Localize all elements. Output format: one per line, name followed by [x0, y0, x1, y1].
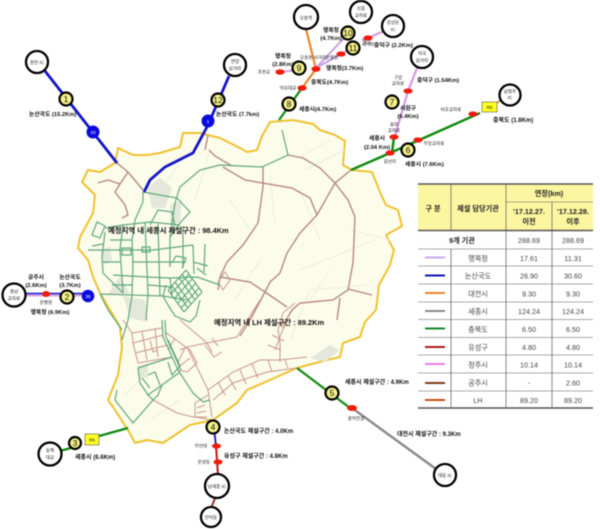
routes 6 and 7: Chungbuk-do, Sejong, Seowon-gu sections: IC	[508, 95, 513, 100]
developed area patches	[100, 178, 340, 378]
routes 8 to 11: Osong and Gangseo area: 11	[349, 43, 358, 53]
route 3: Sejong city to Dongbaek bridge: 동백	[46, 447, 54, 454]
route 2: Chungnam junction	[2, 273, 94, 316]
routes 6 and 7: Chungbuk-do, Sejong, Seowon-gu sections: (2.04 Km)	[364, 145, 390, 151]
routes 6 and 7: Chungbuk-do, Sejong, Seowon-gu sections: 교차로	[388, 127, 400, 134]
routes 8 to 11: Osong and Gangseo area: 행복청(3.7Km)	[326, 64, 363, 72]
total row: 9개 기관	[449, 236, 475, 245]
routes 8 to 11: Osong and Gangseo area: 충덕구 (2.2Km)	[374, 41, 413, 49]
total row	[449, 236, 584, 245]
table values: 대전시	[468, 290, 488, 298]
routes 6 and 7: Chungbuk-do, Sejong, Seowon-gu sections: 부강교차로	[424, 140, 444, 147]
route 12: Nonsan national road from Yeonyang junction	[144, 54, 259, 192]
table values: 124.24	[562, 307, 584, 316]
route 1: Nonsan national road from Cheonan IC: 43	[90, 130, 96, 135]
faint minor roads	[125, 140, 390, 420]
routes 8 to 11: Osong and Gangseo area: 행복청	[323, 26, 339, 34]
table header: 구 분	[425, 204, 441, 213]
route 5: Sejong and Daejeon sections: 대동 IC	[438, 472, 453, 479]
table values: 124.24	[518, 307, 540, 316]
map label: Sejong section: 예정지역 내 세종시 제설구간 : 98.4Km	[108, 226, 229, 235]
route 4: Nonsan road and Yuseong-gu section: 부안대	[195, 442, 207, 450]
routes 8 to 11: Osong and Gangseo area: 운왕천	[326, 54, 338, 60]
route 4: Nonsan road and Yuseong-gu section: 남세종 IC	[208, 483, 227, 490]
routes 8 to 11: Osong and Gangseo area: 세종시(4.7Km)	[299, 105, 336, 113]
table grid	[418, 184, 593, 408]
routes 6 and 7: Chungbuk-do, Sejong, Seowon-gu sections: 6	[406, 145, 411, 155]
LH snow removal roads	[98, 135, 372, 420]
routes 6 and 7: Chungbuk-do, Sejong, Seowon-gu sections: 세종시	[369, 134, 385, 142]
table header: '17.12.28.	[557, 207, 589, 216]
route 5: Sejong and Daejeon sections: 봉덕전설	[348, 415, 364, 422]
route 4: Nonsan road and Yuseong-gu section: 안덕동	[205, 514, 217, 521]
route 5: Sejong and Daejeon sections: 5	[330, 388, 335, 398]
route 2: Chungnam junction: 36	[85, 294, 91, 299]
table header: '17.12.27.	[513, 207, 545, 216]
routes 6 and 7: Chungbuk-do, Sejong, Seowon-gu sections: 충북도 (1.8Km)	[493, 116, 533, 124]
legend rows	[425, 258, 445, 400]
routes 8 to 11: Osong and Gangseo area: 교차로	[355, 12, 367, 19]
table values: 2.60	[566, 378, 580, 388]
table values: 10.14	[564, 360, 582, 370]
Sejong city snow removal roads	[88, 130, 288, 423]
route 3: Sejong city to Dongbaek bridge: R6	[89, 438, 95, 442]
table values: 4.80	[522, 343, 536, 352]
route 2: Chungnam junction: (2.6Km)	[25, 283, 47, 289]
table values: 논산국도	[465, 272, 492, 280]
route 12: Nonsan national road from Yeonyang junction: 논산국도 (7.7km)	[216, 110, 259, 118]
route 4: Nonsan road and Yuseong-gu section: 논산국도 제설구간 : 4.0Km	[224, 427, 293, 435]
route 3: Sejong city to Dongbaek bridge	[38, 428, 128, 466]
routes 6 and 7: Chungbuk-do, Sejong, Seowon-gu sections: 교차로	[392, 80, 404, 87]
routes 8 to 11: Osong and Gangseo area: 9	[297, 63, 302, 73]
table: snow removal length by agency	[418, 184, 593, 408]
routes 8 to 11: Osong and Gangseo area: 충북도(4.7Km)	[311, 78, 348, 86]
route 5: Sejong and Daejeon sections: 대전시 제설구간 : 9.3Km	[397, 430, 461, 438]
routes 8 to 11: Osong and Gangseo area	[258, 1, 413, 120]
route 4: Nonsan road and Yuseong-gu section: 문성동	[198, 458, 210, 464]
routes 8 to 11: Osong and Gangseo area: IC	[391, 27, 396, 32]
routes 8 to 11: Osong and Gangseo area: 미호대교	[280, 84, 296, 92]
table header: 연장(km)	[535, 189, 564, 198]
route 2: Chungnam junction: 2	[65, 292, 70, 302]
total row: 288.69	[518, 236, 540, 245]
routes 6 and 7: Chungbuk-do, Sejong, Seowon-gu sections	[351, 46, 533, 170]
table header: 제설 담당기관	[457, 204, 499, 213]
routes 8 to 11: Osong and Gangseo area: 강상돈	[387, 19, 399, 25]
table values: 세종시	[468, 307, 488, 316]
map: Sejong region	[78, 120, 402, 443]
route 3: Sejong city to Dongbaek bridge: 세종시 (6.6Km)	[75, 453, 115, 461]
table values: 6.50	[522, 325, 536, 334]
table values: 30.60	[564, 272, 582, 280]
route 2: Chungnam junction: 충남	[10, 288, 18, 294]
table values: 89.20	[520, 396, 538, 405]
table values: 26.90	[520, 272, 538, 280]
routes 6 and 7: Chungbuk-do, Sejong, Seowon-gu sections: 갈산리	[384, 158, 396, 165]
routes 8 to 11: Osong and Gangseo area: 행복청	[275, 52, 291, 60]
routes 6 and 7: Chungbuk-do, Sejong, Seowon-gu sections: R6	[487, 105, 493, 110]
table values	[465, 254, 584, 405]
routes 6 and 7: Chungbuk-do, Sejong, Seowon-gu sections: (6.4Km)	[397, 114, 419, 120]
routes 6 and 7: Chungbuk-do, Sejong, Seowon-gu sections: 세종시 (7.6Km)	[405, 160, 444, 168]
table header	[418, 184, 593, 230]
route 2: Chungnam junction: 공주시	[28, 274, 44, 281]
route 1: Nonsan national road from Cheonan IC: 1	[64, 94, 69, 104]
route 5: Sejong and Daejeon sections	[297, 368, 461, 486]
routes 8 to 11: Osong and Gangseo area: 조천교	[258, 68, 270, 74]
routes 6 and 7: Chungbuk-do, Sejong, Seowon-gu sections: 남청주	[504, 88, 516, 95]
routes 6 and 7: Chungbuk-do, Sejong, Seowon-gu sections: 삼거리	[416, 57, 428, 64]
routes 6 and 7: Chungbuk-do, Sejong, Seowon-gu sections: 서원구	[400, 104, 417, 112]
region boundary	[78, 120, 402, 443]
routes 6 and 7: Chungbuk-do, Sejong, Seowon-gu sections: 휴리	[390, 121, 398, 128]
table values: 89.20	[564, 396, 582, 405]
route 2: Chungnam junction: (3.7Km)	[59, 283, 81, 289]
route 2: Chungnam junction: 행복청 (6.9Km)	[31, 308, 70, 316]
table values: 행복청	[468, 254, 488, 263]
table values: 유성구	[468, 343, 488, 352]
table values: 4.80	[566, 343, 580, 352]
routes 8 to 11: Osong and Gangseo area: (4.7Km)	[320, 36, 342, 42]
routes 8 to 11: Osong and Gangseo area: 8	[287, 99, 292, 109]
table values: LH	[473, 396, 483, 405]
total row: 288.69	[562, 236, 584, 245]
route 12: Nonsan national road from Yeonyang junction: 12	[213, 95, 223, 105]
table values: 공주시	[468, 378, 488, 388]
table values: 11.31	[564, 254, 582, 263]
route 2: Chungnam junction: 논산국도	[59, 273, 81, 281]
route 3: Sejong city to Dongbaek bridge: 3	[73, 438, 78, 448]
routes 6 and 7: Chungbuk-do, Sejong, Seowon-gu sections: 석곡	[418, 50, 426, 57]
routes 8 to 11: Osong and Gangseo area: (2.8Km)	[272, 62, 294, 68]
table values: 10.14	[520, 360, 538, 370]
routes 8 to 11: Osong and Gangseo area: 신흥	[357, 5, 365, 11]
routes 8 to 11: Osong and Gangseo area: 오송역	[300, 14, 312, 22]
route 3: Sejong city to Dongbaek bridge: 대교	[46, 454, 54, 461]
route 12: Nonsan national road from Yeonyang junction: 연양	[231, 58, 239, 64]
routes 8 to 11: Osong and Gangseo area: 10	[343, 28, 353, 38]
route 1: Nonsan national road from Cheonan IC: 천안 IC	[30, 59, 45, 65]
table values: 충북도	[468, 325, 488, 334]
routes 6 and 7: Chungbuk-do, Sejong, Seowon-gu sections: 비호교차로	[441, 106, 461, 113]
route 4: Nonsan road and Yuseong-gu section: 유성구 제설구간 : 4.8Km	[224, 452, 288, 460]
routes 8 to 11: Osong and Gangseo area: 오송천 사거리	[300, 54, 326, 61]
routes 6 and 7: Chungbuk-do, Sejong, Seowon-gu sections: 충덕구 (1.54Km)	[417, 76, 459, 84]
route 2: Chungnam junction: 교차로	[8, 295, 20, 302]
table values: 9.30	[522, 290, 536, 298]
route 1: Nonsan national road from Cheonan IC: 논산국도 (15.2Km)	[29, 110, 76, 118]
table values: 9.30	[566, 290, 580, 298]
route 2: Chungnam junction: 문평천	[40, 299, 52, 305]
route 12: Nonsan national road from Yeonyang junction: 삼거리	[229, 65, 241, 72]
table header: 이후	[566, 217, 580, 226]
route 4: Nonsan road and Yuseong-gu section	[195, 420, 293, 527]
route 4: Nonsan road and Yuseong-gu section: 4	[211, 422, 216, 432]
route 5: Sejong and Daejeon sections: 세종시 제설구간 : 4.9Km	[345, 378, 409, 386]
route 1: Nonsan national road from Cheonan IC	[26, 51, 117, 163]
table header: 이전	[522, 217, 536, 226]
table values: 6.50	[566, 325, 580, 334]
routes 6 and 7: Chungbuk-do, Sejong, Seowon-gu sections: 구암	[394, 74, 402, 81]
table values: 청주시	[468, 360, 488, 370]
table values: 17.61	[520, 254, 538, 263]
routes 8 to 11: Osong and Gangseo area: 월곡	[363, 39, 371, 46]
map label: LH section: 예정지역 내 LH 제설구간 : 89.2Km	[214, 318, 324, 327]
routes 8 to 11: Osong and Gangseo area: 사거리	[362, 41, 374, 48]
table values: -	[528, 378, 531, 388]
route 12: Nonsan national road from Yeonyang junction: 1	[207, 119, 210, 124]
routes 6 and 7: Chungbuk-do, Sejong, Seowon-gu sections: 7	[390, 97, 395, 107]
